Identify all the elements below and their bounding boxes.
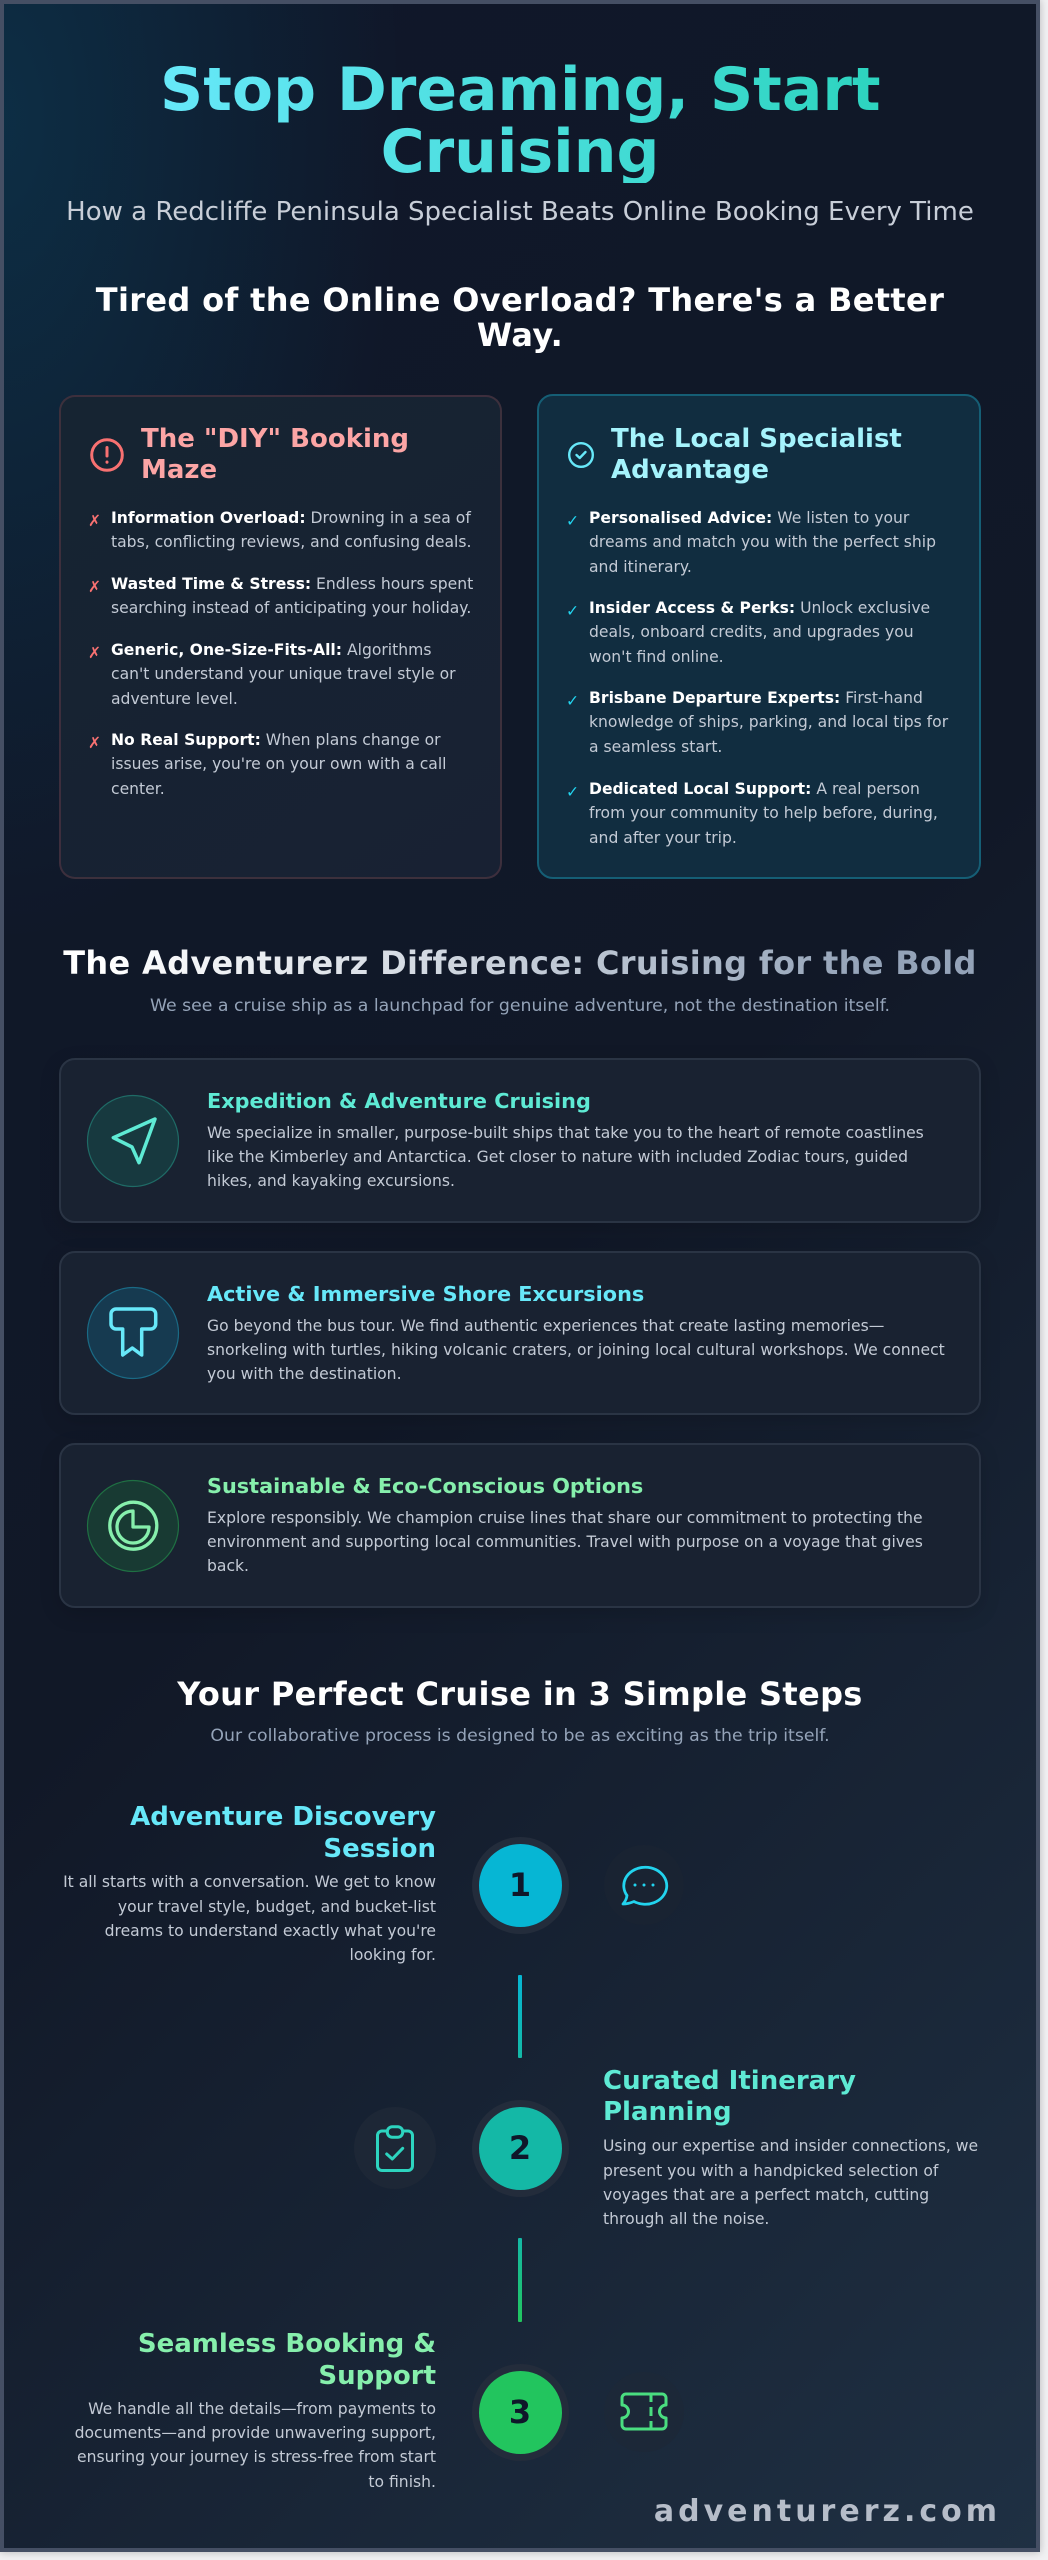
icon: ticket <box>620 2392 668 2430</box>
list item: insider access: Insider Access & Perks: Unlock exclusive <box>589 599 930 617</box>
list item: information overload <box>88 509 472 551</box>
list item: no real support: No Real Support: When plans change or <box>111 731 441 749</box>
text: step 1 <box>63 1873 436 1964</box>
heading: DIY booking maze: The "DIY" Booking <box>141 424 409 454</box>
panel: DIY booking maze <box>59 395 502 879</box>
list item: personalised advice: ✓ <box>566 512 579 530</box>
text: step 3: to finish. <box>368 2473 436 2491</box>
footer brand: adventurerz.com <box>654 2494 1001 2529</box>
heading: step 1: Session <box>323 1834 436 1864</box>
heading: step 3: Support <box>318 2360 436 2390</box>
text: step 3 <box>75 2400 436 2491</box>
list item: Brisbane departure: ✓ <box>566 692 579 710</box>
heading: step 2: Curated Itinerary <box>603 2066 856 2096</box>
list item: Brisbane departure: Brisbane Departure Experts: First-hand <box>589 689 923 707</box>
list item: personalised advice: Personalised Advice: We listen to your <box>589 509 909 527</box>
list item: insider access: deals, onboard credits, and upgrades you <box>589 623 914 641</box>
list item: Brisbane departure: knowledge of ships, parking, and local tips for <box>589 713 948 731</box>
heading: local specialist advantage: The Local Specialist <box>611 424 902 454</box>
number: 1 <box>478 1844 562 1926</box>
title <box>160 59 880 183</box>
icon: pie circle <box>86 1480 180 1572</box>
heading: step 2 <box>603 2066 856 2127</box>
heading: expedition: Expedition & Adventure Cruising <box>207 1088 591 1112</box>
heading: DIY booking maze <box>141 424 409 485</box>
list item: information overload: tabs, conflicting reviews, and confusing deals. <box>111 533 471 551</box>
text: shore excursions: you with the destination. <box>207 1365 402 1383</box>
text: step 1: dreams to understand exactly what you're <box>105 1922 436 1940</box>
list item: personalised advice: dreams and match you with the perfect ship <box>589 533 936 551</box>
icon: clipboard check <box>376 2125 414 2172</box>
heading: step 2: Planning <box>603 2097 732 2127</box>
panel: expedition cruising <box>59 1058 981 1223</box>
text: step 3: documents—and provide unwavering support, <box>75 2424 436 2442</box>
text: step 2: voyages that are a perfect match, cutting <box>603 2186 929 2204</box>
text: sustainable: Explore responsibly. We champion cruise lines that share our commitment to protecting the <box>207 1509 923 1527</box>
text: step 2: through all the noise. <box>603 2210 769 2228</box>
text: step 1: your travel style, budget, and bucket-list <box>118 1898 436 1916</box>
list item: dedicated support: from your community to help before, during, <box>589 804 938 822</box>
heading: DIY booking maze: Maze <box>141 455 217 485</box>
panel: shore excursions <box>59 1251 981 1415</box>
number: 2: 2 <box>509 2128 531 2166</box>
icon: signpost <box>86 1286 180 1380</box>
text: shore excursions: snorkeling with turtles, hiking volcanic craters, or joining local cultural workshops. We connect <box>207 1341 945 1359</box>
text: step 1: looking for. <box>350 1946 436 1964</box>
text: expedition: hikes, and kayaking excursions. <box>207 1172 455 1190</box>
list item: wasted time: searching instead of anticipating your holiday. <box>111 599 471 617</box>
list item: no real support: issues arise, you're on your own with a call <box>111 755 447 773</box>
text: step 2: present you with a handpicked selection of <box>603 2162 938 2180</box>
icon: navigation arrow <box>86 1094 180 1188</box>
list item: dedicated support: ✓ <box>566 783 579 801</box>
text: sustainable: back. <box>207 1557 249 1575</box>
number: 1: 1 <box>509 1866 531 1904</box>
text: sustainable <box>207 1509 923 1575</box>
number: 3: 3 <box>509 2392 531 2430</box>
subtitle: How a Redcliffe Peninsula Specialist Beats Online Booking Every Time <box>66 196 974 226</box>
list item: wasted time: ✗ <box>88 578 101 596</box>
heading: the Adventurerz difference: The Adventurerz Difference: Cruising for the Bold <box>63 944 977 982</box>
heading: online overload <box>96 280 944 354</box>
text: step 1: It all starts with a conversation. We get to know <box>63 1873 436 1891</box>
list item: personalised advice <box>566 509 936 576</box>
heading: step 3 <box>138 2329 436 2390</box>
heading: sustainable: Sustainable & Eco-Conscious Options <box>207 1474 643 1498</box>
title: Cruising <box>381 117 659 187</box>
text: expedition: like the Kimberley and Antarctica. Get closer to nature with included Zodiac tours, guided <box>207 1148 908 1166</box>
text: step 3: ensuring your journey is stress-free from start <box>77 2448 436 2466</box>
list item: personalised advice: and itinerary. <box>589 558 692 576</box>
list item: insider access: won't find online. <box>589 648 724 666</box>
list item: generic: adventure level. <box>111 690 238 708</box>
heading: step 1: Adventure Discovery <box>130 1802 436 1832</box>
icon: check circle <box>568 442 594 468</box>
list item: dedicated support: Dedicated Local Support: A real person <box>589 780 920 798</box>
number: 2 <box>478 2106 562 2190</box>
text: expedition: We specialize in smaller, purpose-built ships that take you to the heart of remote coastlines <box>207 1124 924 1142</box>
heading: step 3: Seamless Booking & <box>138 2329 436 2359</box>
heading: online overload: Way. <box>477 316 563 354</box>
list item: generic <box>88 641 456 708</box>
list item: generic: can't understand your unique travel style or <box>111 665 456 683</box>
connector line 2 <box>518 2238 522 2322</box>
step 2 <box>376 2066 978 2228</box>
text: step 2: Using our expertise and insider connections, we <box>603 2137 978 2155</box>
list item: wasted time <box>88 575 473 617</box>
text: shore excursions <box>207 1317 945 1383</box>
panel: local specialist advantage <box>537 394 981 879</box>
list item: insider access <box>566 599 930 666</box>
step 1 <box>63 1802 668 1964</box>
icon: alert circle <box>90 438 124 472</box>
list item: insider access: ✓ <box>566 602 579 620</box>
title: Stop Dreaming, Start <box>160 55 881 125</box>
panel: sustainable options <box>59 1443 981 1608</box>
subheading: steps: Our collaborative process is designed to be as exciting as the trip itself. <box>210 1726 830 1746</box>
text: shore excursions: Go beyond the bus tour. We find authentic experiences that create lasting memories— <box>207 1317 884 1335</box>
list item: Brisbane departure: a seamless start. <box>589 738 722 756</box>
heading: shore excursions: Active & Immersive Shore Excursions <box>207 1282 644 1306</box>
heading: online overload: Tired of the Online Overload? There's a Better <box>96 280 944 318</box>
text: step 3: We handle all the details—from payments to <box>88 2400 436 2418</box>
list item: dedicated support: and after your trip. <box>589 829 737 847</box>
list item: information overload: Information Overload: Drowning in a sea of <box>111 509 471 527</box>
heading: three simple steps: Your Perfect Cruise in 3 Simple Steps <box>177 1674 863 1712</box>
list item: wasted time: Wasted Time & Stress: Endless hours spent <box>111 575 473 593</box>
list item: generic: ✗ <box>88 644 101 662</box>
heading: step 1 <box>130 1802 436 1864</box>
list item: dedicated support <box>566 780 938 847</box>
list item: Brisbane departure <box>566 689 948 756</box>
text: step 2 <box>603 2137 978 2228</box>
list item: no real support: ✗ <box>88 734 101 752</box>
list item: generic: Generic, One-Size-Fits-All: Algorithms <box>111 641 431 659</box>
number: 3 <box>478 2370 562 2454</box>
list item: information overload: ✗ <box>88 512 101 530</box>
list item: no real support <box>88 731 447 798</box>
text: expedition <box>207 1124 924 1190</box>
heading: local specialist advantage <box>611 424 902 485</box>
list item: no real support: center. <box>111 780 165 798</box>
connector line 1 <box>518 1975 522 2058</box>
icon: chat bubble <box>622 1866 668 1906</box>
step 3 <box>75 2329 668 2491</box>
text: sustainable: environment and supporting local communities. Travel with purpose on a voyage that gives <box>207 1533 923 1551</box>
heading: local specialist advantage: Advantage <box>611 455 769 485</box>
subheading: difference: We see a cruise ship as a launchpad for genuine adventure, not the destination itself. <box>150 996 890 1016</box>
